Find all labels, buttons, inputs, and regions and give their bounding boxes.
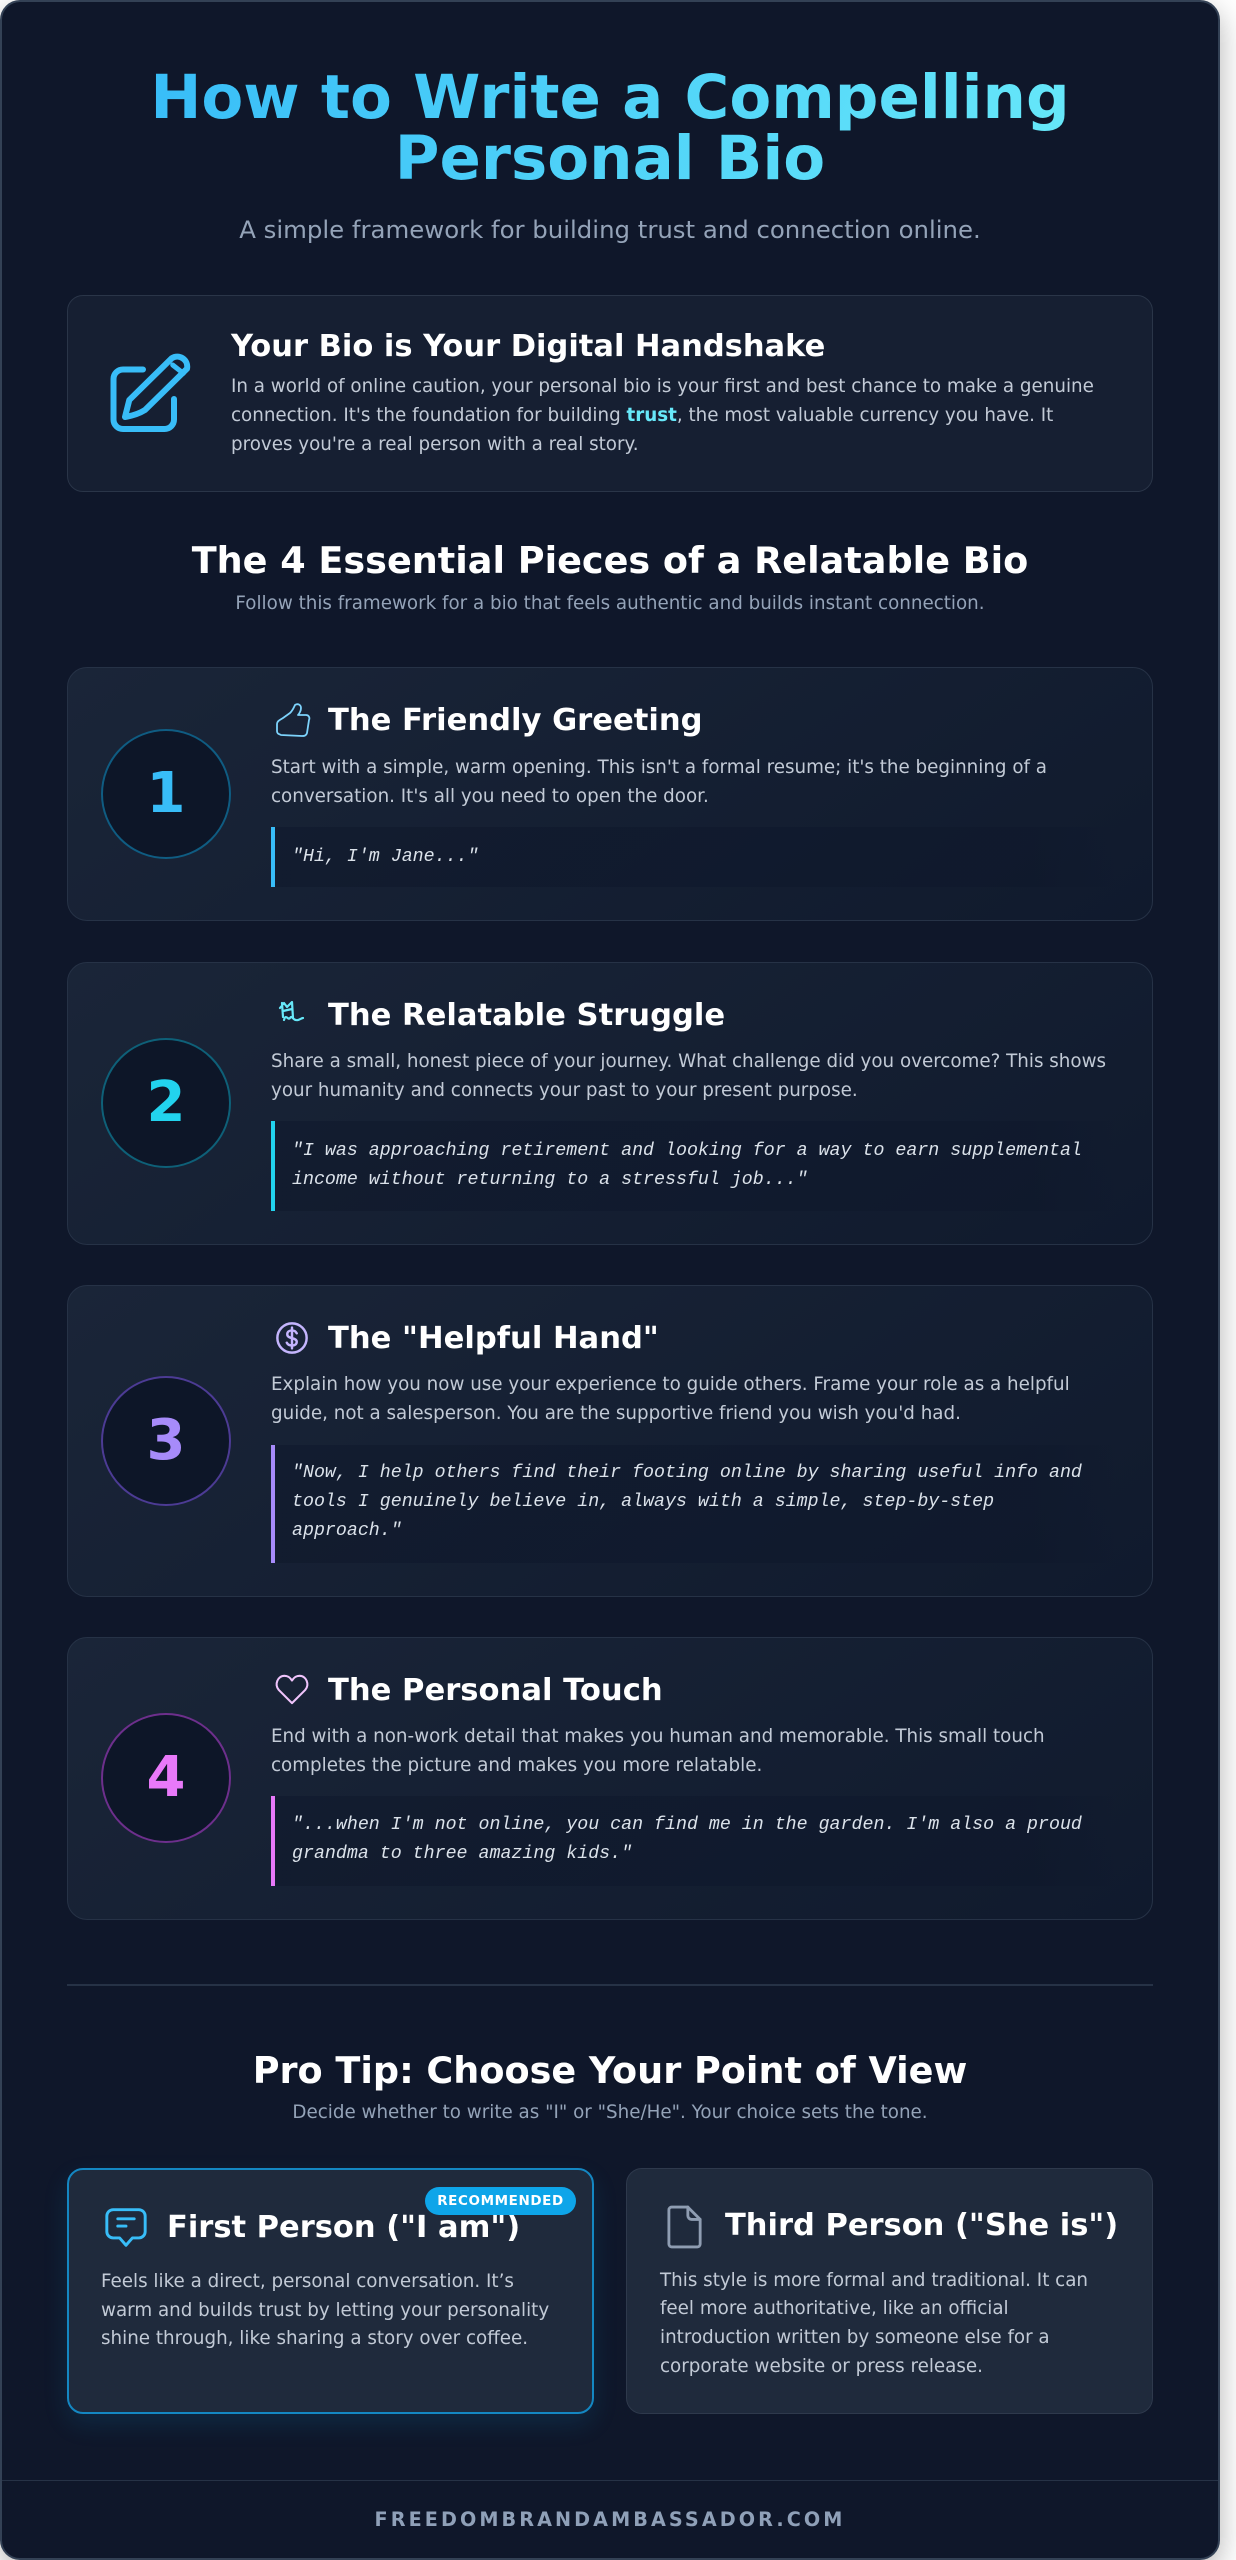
intro text: proves you're a real person with a real story.: [231, 434, 639, 455]
footer: FREEDOMBRANDAMBASSADOR.COM: [375, 2508, 845, 2531]
step 2 text: Share a small, honest piece of your journey. What challenge did you overcome? This shows: [271, 1051, 1106, 1072]
step 3 text: Explain how you now use your experience to guide others. Frame your role as a helpful: [271, 1374, 1070, 1395]
step 1 text: [271, 757, 1047, 807]
third person text: [660, 2270, 1088, 2377]
step 1 text: conversation. It's all you need to open the door.: [271, 786, 709, 807]
intro text: In a world of online caution, your personal bio is your first and best chance to make a genuine: [231, 376, 1094, 397]
first person text: Feels like a direct, personal conversation. It’s: [101, 2271, 514, 2292]
title: How to Write a Compelling: [150, 62, 1070, 133]
third person text: corporate website or press release.: [660, 2356, 983, 2377]
icon: thumbs up: [276, 703, 310, 737]
step 4 quote: grandma to three amazing kids.": [292, 1844, 632, 1864]
intro text: connection. It's the foundation for building trust, the most valuable currency you have. It: [231, 405, 1053, 426]
icon: dollar coin: [276, 1322, 308, 1354]
intro heading: Your Bio is Your Digital Handshake: [231, 329, 825, 364]
step 2 text: [271, 1051, 1106, 1101]
subtitle: A simple framework for building trust and connection online.: [239, 215, 981, 244]
title: [0, 67, 1220, 189]
step 1 quote: "Hi, I'm Jane...": [292, 847, 478, 867]
step 4 quote: "...when I'm not online, you can find me in the garden. I'm also a proud: [292, 1815, 1082, 1835]
recommended badge: [425, 2187, 576, 2215]
panel: step 1 card: [67, 667, 1153, 921]
step 4 text: [271, 1726, 1045, 1776]
panel: digital handshake intro: [67, 295, 1153, 492]
pro tip subheading: Decide whether to write as "I" or "She/He". Your choice sets the tone.: [292, 2102, 928, 2123]
step 2 text: your humanity and connects your past to your present purpose.: [271, 1080, 858, 1101]
step 3 quote: tools I genuinely believe in, always with a simple, step-by-step: [292, 1492, 994, 1512]
step 4 heading: The Personal Touch: [328, 1673, 663, 1708]
icon: document: [668, 2206, 702, 2248]
step 4 number: [101, 1713, 231, 1843]
step 2 number: 2: [147, 1070, 185, 1135]
step 1 number: 1: [147, 761, 185, 826]
first person text: shine through, like sharing a story over coffee.: [101, 2328, 528, 2349]
panel: step 2 card: [67, 962, 1153, 1245]
step 4 quote: [271, 1796, 1117, 1886]
step 1 number: [101, 729, 231, 859]
section subheading: Follow this framework for a bio that feels authentic and builds instant connection.: [235, 593, 985, 614]
step 1 heading: The Friendly Greeting: [328, 703, 703, 738]
step 1 quote: [271, 827, 1117, 887]
step 3 quote: "Now, I help others find their footing online by sharing useful info and: [292, 1463, 1082, 1483]
panel: step 3 card: [67, 1285, 1153, 1597]
step 1 text: Start with a simple, warm opening. This isn't a formal resume; it's the beginning of a: [271, 757, 1047, 778]
step 2 heading: The Relatable Struggle: [328, 998, 725, 1033]
step 4 number: 4: [147, 1745, 185, 1810]
third person text: This style is more formal and traditional. It can: [660, 2270, 1088, 2291]
step 3 text: guide, not a salesperson. You are the supportive friend you wish you'd had.: [271, 1403, 961, 1424]
icon: pencil on notepad: [110, 354, 190, 432]
step 3 text: [271, 1374, 1070, 1424]
recommended badge: RECOMMENDED: [437, 2193, 564, 2209]
icon: chat bubble: [105, 2208, 147, 2247]
panel: third person card: [626, 2168, 1153, 2414]
step 3 number: 3: [147, 1408, 185, 1473]
third person text: feel more authoritative, like an official: [660, 2298, 1009, 2319]
step 2 quote: "I was approaching retirement and looking for a way to earn supplemental: [292, 1141, 1082, 1161]
icon: squiggle chart: [278, 1000, 304, 1022]
title: Personal Bio: [395, 123, 825, 194]
step 3 number: [101, 1376, 231, 1506]
panel: first person card: [67, 2168, 594, 2414]
step 4 text: completes the picture and makes you more relatable.: [271, 1755, 762, 1776]
intro text: [231, 376, 1094, 455]
step 3 quote: [271, 1445, 1117, 1563]
step 4 text: End with a non-work detail that makes you human and memorable. This small touch: [271, 1726, 1045, 1747]
step 2 quote: [271, 1121, 1117, 1211]
first person text: warm and builds trust by letting your personality: [101, 2300, 549, 2321]
pro tip heading: Pro Tip: Choose Your Point of View: [253, 2049, 967, 2092]
icon: heart: [276, 1674, 308, 1704]
step 3 heading: The "Helpful Hand": [328, 1321, 659, 1356]
third person heading: Third Person ("She is"): [725, 2208, 1118, 2243]
step 2 number: [101, 1038, 231, 1168]
step 2 quote: income without returning to a stressful job...": [292, 1170, 808, 1190]
section heading: The 4 Essential Pieces of a Relatable Bio: [192, 539, 1028, 582]
panel: step 4 card: [67, 1637, 1153, 1920]
first person text: [101, 2271, 549, 2349]
first person heading: First Person ("I am"): [167, 2210, 520, 2245]
step 3 quote: approach.": [292, 1521, 402, 1541]
third person text: introduction written by someone else for a: [660, 2327, 1050, 2348]
